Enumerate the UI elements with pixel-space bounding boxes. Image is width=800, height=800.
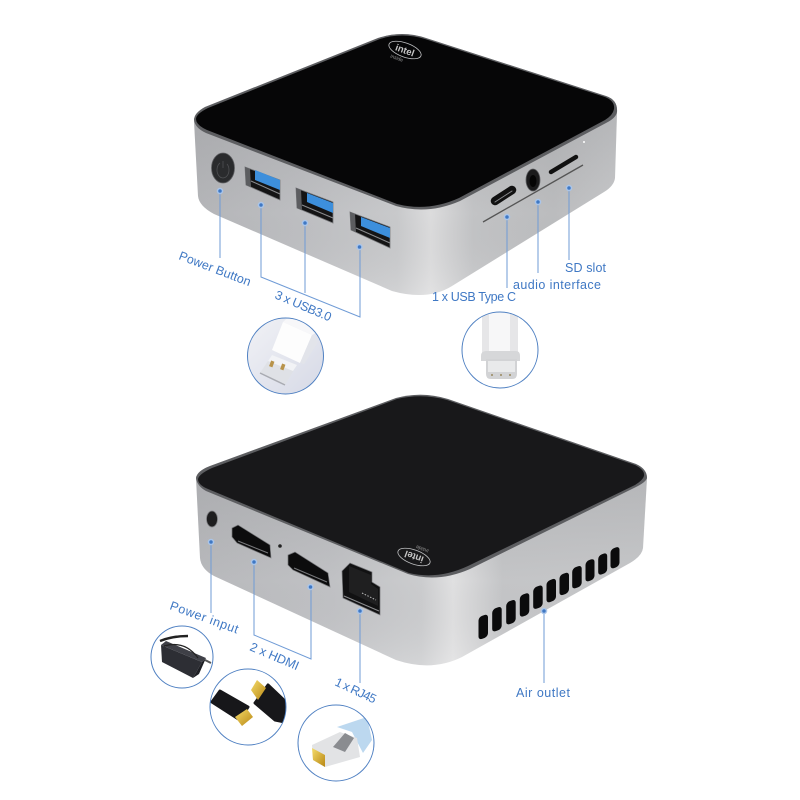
intel logo bottom (396, 538, 435, 569)
HDMI port 2 (288, 552, 330, 587)
top mini PC device (194, 34, 617, 295)
top device callouts (218, 186, 572, 317)
power button (212, 153, 234, 183)
bottom device callouts (208, 540, 546, 683)
icon: USB-C plug (462, 305, 538, 388)
icon: USB-A plug (247, 318, 324, 394)
intel logo bottom: intel (403, 548, 425, 565)
callout: air outlet leader (542, 608, 546, 683)
power input jack (206, 511, 218, 527)
slot line (483, 165, 583, 222)
label: 2 x HDMI: 2 x HDMI (248, 640, 301, 673)
label: 1 x USB Type C: 1 x USB Type C (432, 290, 516, 304)
callout: USB3.0 leader (258, 202, 362, 317)
top device body (194, 34, 617, 295)
air vents (478, 546, 620, 640)
label: Air outlet: Air outlet (516, 686, 571, 700)
audio jack (526, 169, 540, 191)
icon: RJ45 connector (298, 705, 374, 781)
label: 1 x RJ45: 1 x RJ45 (333, 675, 379, 706)
callout: power input leader (208, 540, 214, 613)
bottom device bezel (196, 395, 647, 578)
callout: SD leader (566, 186, 572, 260)
SD slot (551, 157, 576, 172)
callout: HDMI leader (252, 560, 313, 659)
bottom black lid (198, 396, 644, 575)
intel logo top (384, 38, 423, 69)
USB port 1 (245, 167, 280, 200)
status LED (583, 141, 585, 143)
label: 3 x USB3.0: 3 x USB3.0 (273, 288, 334, 324)
top device shading (194, 113, 617, 295)
label: audio interface: audio interface (513, 278, 601, 292)
label: SD slot: SD slot (565, 261, 607, 275)
bottom device body (196, 395, 647, 665)
label: Power input: Power input (168, 599, 241, 637)
USB port 2 (296, 188, 333, 223)
USB-C port (495, 190, 512, 202)
callout: power button leader (218, 188, 222, 258)
icon: power adapter (151, 626, 213, 688)
label: Power Button: Power Button (177, 249, 253, 289)
indicator dot (278, 544, 282, 548)
bottom mini PC device (196, 395, 647, 665)
RJ45 port (342, 563, 380, 615)
callout: RJ45 leader (358, 608, 362, 683)
intel logo top: intel (394, 42, 416, 59)
icon: HDMI cables (210, 669, 287, 745)
HDMI port 1 (232, 525, 271, 558)
intel logo bottom: inside (415, 543, 430, 553)
callout: audio leader (536, 200, 540, 273)
top black lid (196, 36, 614, 207)
intel logo top: inside (389, 54, 404, 64)
USB port 3 (350, 212, 390, 248)
top device bezel (194, 34, 617, 210)
bottom device shading (196, 478, 647, 665)
callout: USB-C leader (504, 214, 510, 288)
